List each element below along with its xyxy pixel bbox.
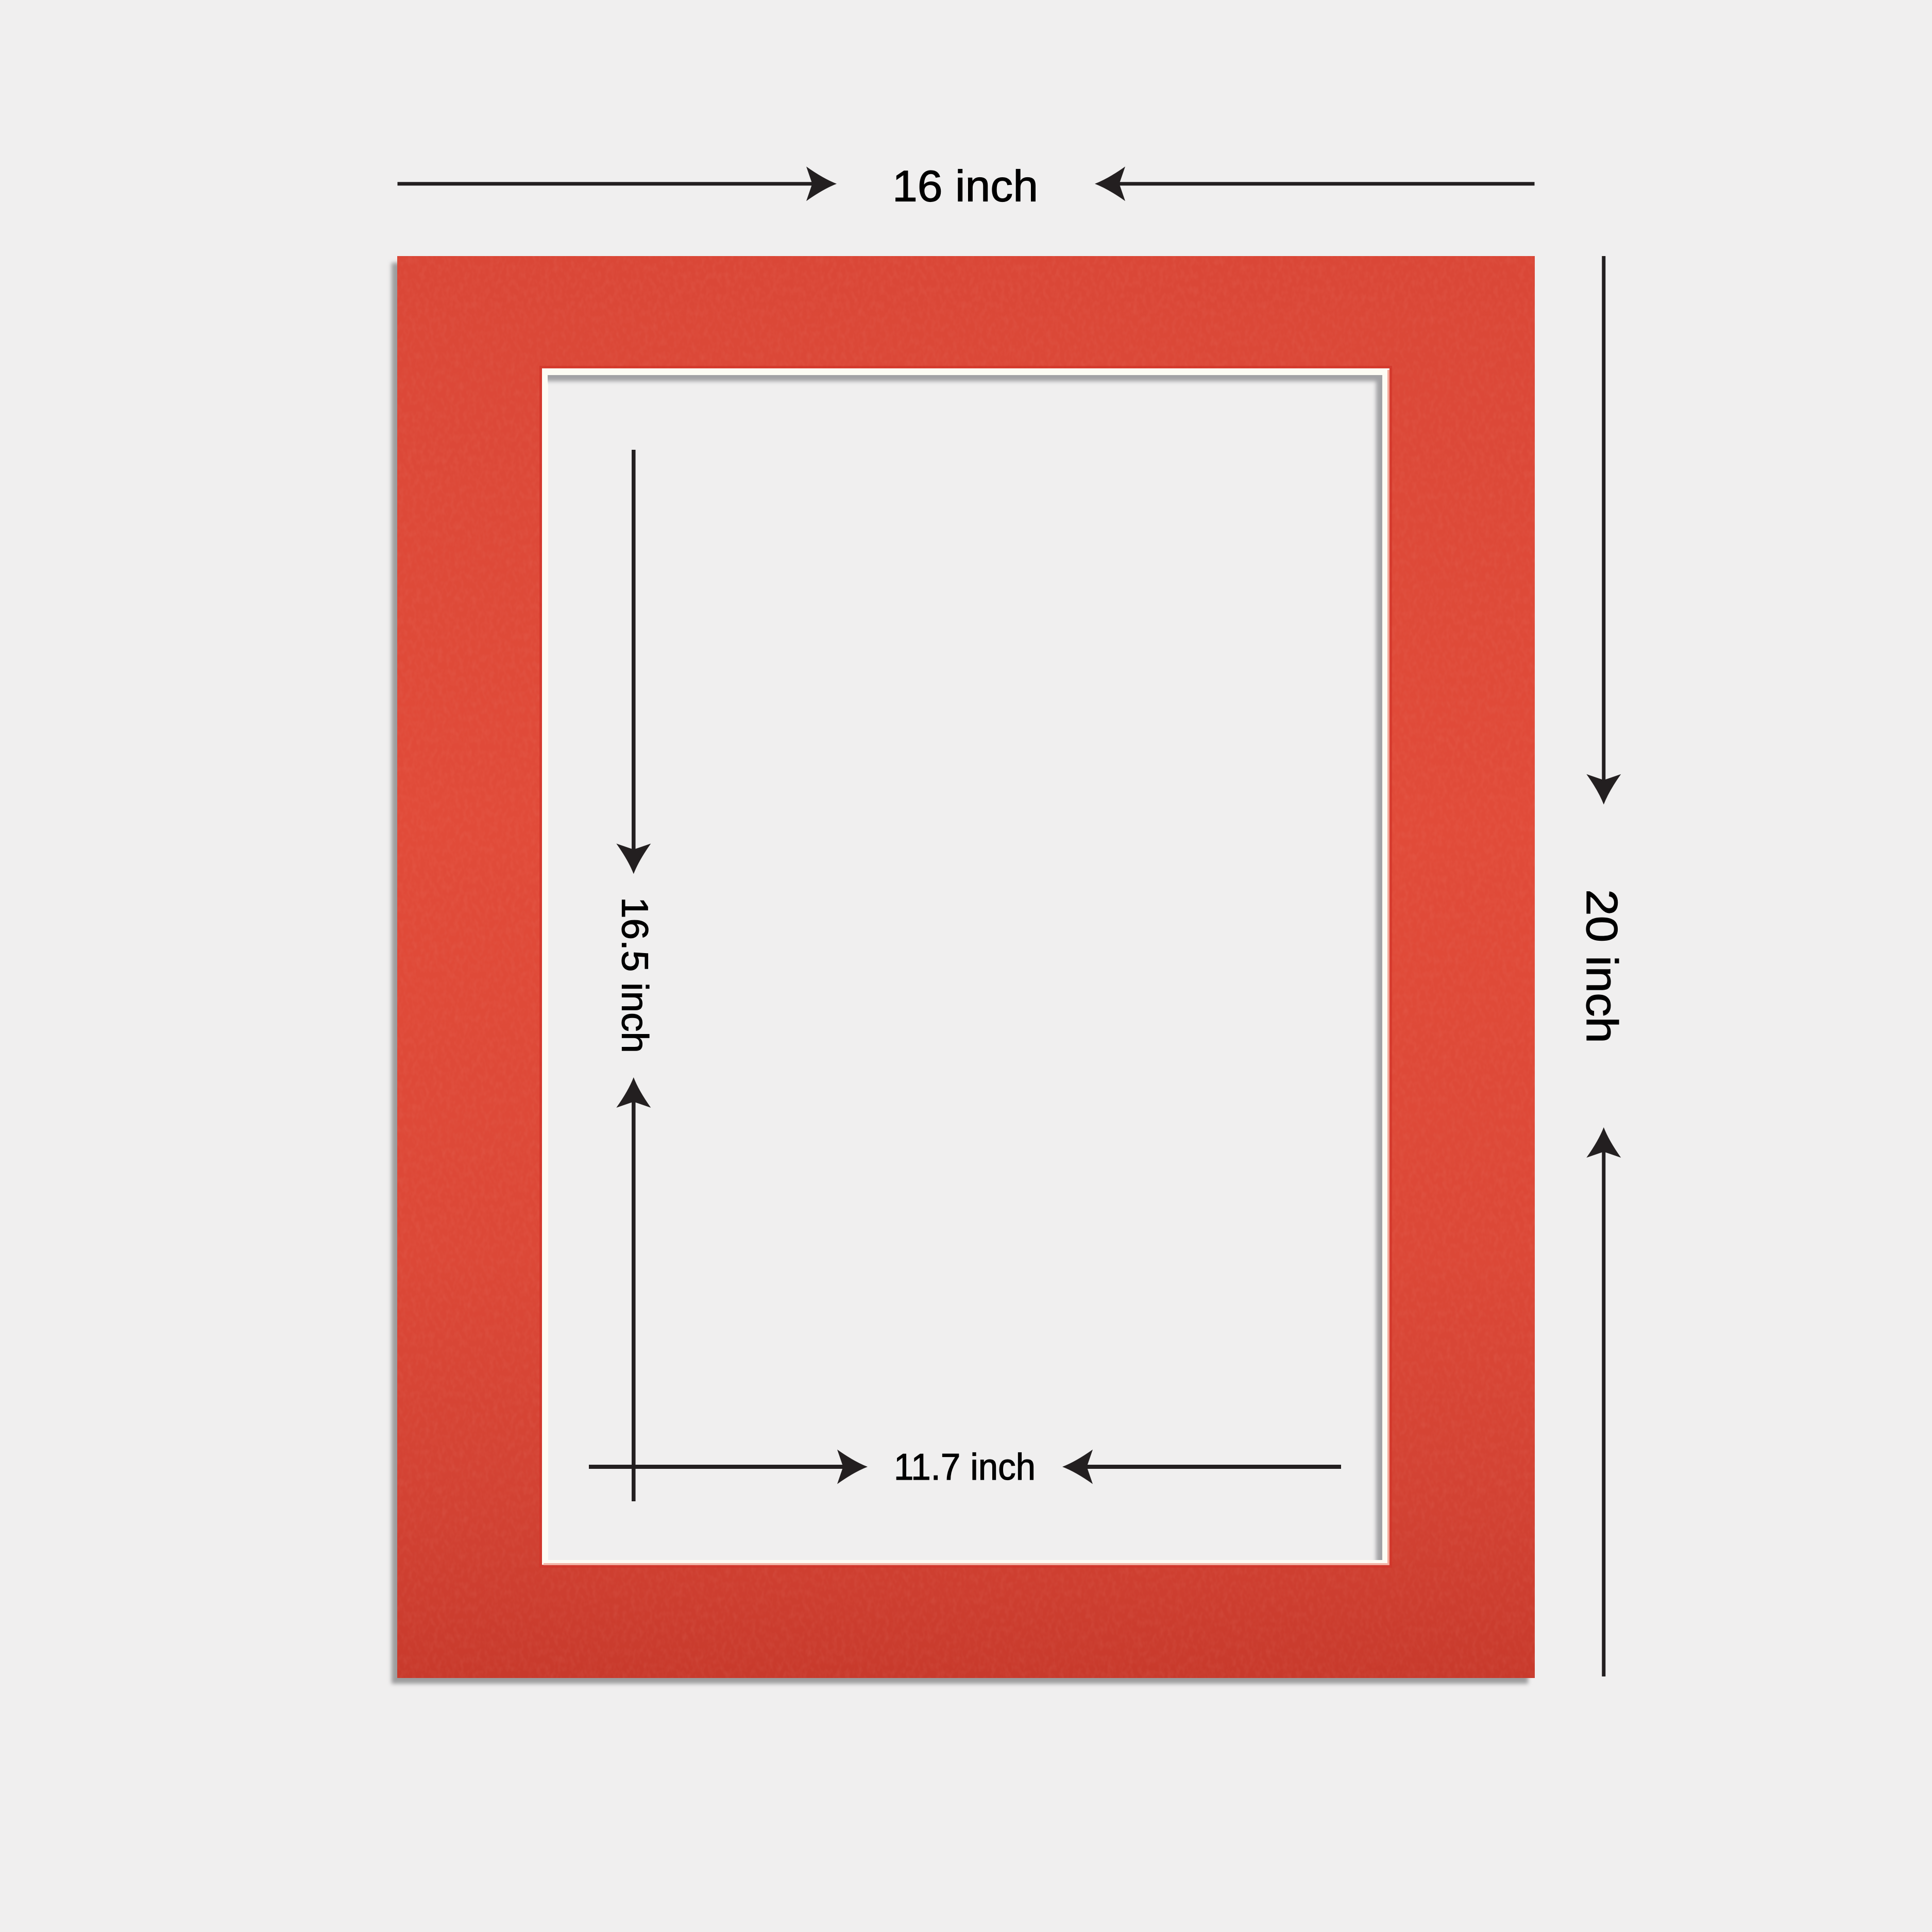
label: 11.7 inch: 11.7 inch bbox=[894, 1447, 1036, 1488]
bevel highlight right edge bbox=[1387, 370, 1389, 1565]
arrow: outer height, bottom bbox=[1586, 1127, 1621, 1676]
inner shadow of the opening bbox=[548, 375, 1382, 1560]
white bevel bbox=[542, 368, 1388, 1565]
arrow: outer width, right bbox=[1095, 166, 1534, 201]
opening background bbox=[542, 368, 1389, 1565]
red mat border bbox=[397, 256, 1535, 1678]
arrow: inner height, top bbox=[616, 450, 651, 874]
mat paper texture bbox=[397, 256, 1535, 1678]
dark red cut edge bbox=[539, 366, 1392, 1568]
panel: red mat board frame bbox=[392, 256, 1535, 1684]
label: 20 inch: 20 inch bbox=[1577, 889, 1626, 1043]
label: 16 inch: 16 inch bbox=[892, 162, 1038, 211]
arrow: outer width, left bbox=[398, 166, 837, 201]
frame drop shadow bbox=[392, 263, 1528, 1684]
bevel highlight bottom edge bbox=[544, 1563, 1388, 1565]
arrow: inner width, left bbox=[589, 1450, 868, 1484]
arrow: outer height, top bbox=[1586, 256, 1621, 805]
label: 16.5 inch: 16.5 inch bbox=[614, 897, 655, 1053]
arrow: inner height, bottom bbox=[616, 1077, 651, 1501]
arrow: inner width, right bbox=[1062, 1450, 1341, 1484]
